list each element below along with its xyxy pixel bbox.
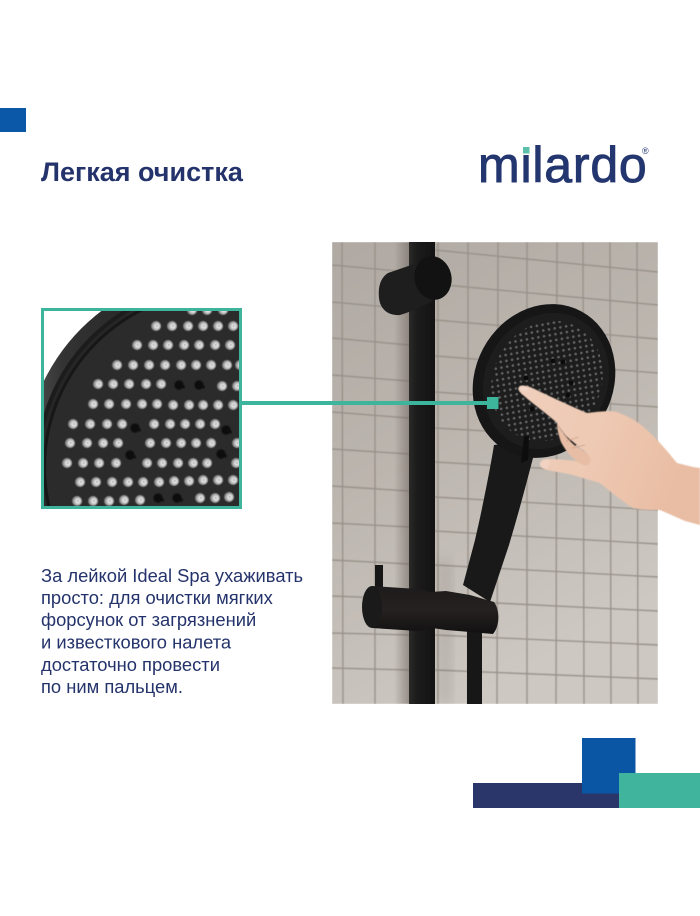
body text: просто: для очистки мягких xyxy=(41,587,273,608)
body text: по ним пальцем. xyxy=(41,676,183,697)
sliding holder clamp xyxy=(362,565,498,634)
photo background: tiled wall xyxy=(332,229,658,704)
hose xyxy=(467,628,482,704)
photo: shower system on tiled wall xyxy=(332,229,700,704)
sliding rail xyxy=(409,242,435,704)
title: Легкая очистка xyxy=(41,157,244,187)
inset: close-up of soft nozzles xyxy=(41,308,242,509)
hand pressing the nozzles xyxy=(518,386,700,525)
top wall bracket xyxy=(379,253,456,315)
hand shower head xyxy=(472,304,616,463)
logo: milardo: ® xyxy=(642,146,649,156)
body text: За лейкой Ideal Spa ухаживать xyxy=(41,565,303,586)
decorative blocks bottom right xyxy=(473,738,700,808)
callout connector from inset to shower head xyxy=(242,397,498,409)
body text: достаточно провести xyxy=(41,654,220,675)
body text: форсунок от загрязнений xyxy=(41,609,256,630)
hand shower handle xyxy=(463,440,535,602)
decorative corner square xyxy=(0,108,26,132)
body text: и известкового налета xyxy=(41,632,232,652)
logo: milardo: milardo xyxy=(478,137,648,193)
